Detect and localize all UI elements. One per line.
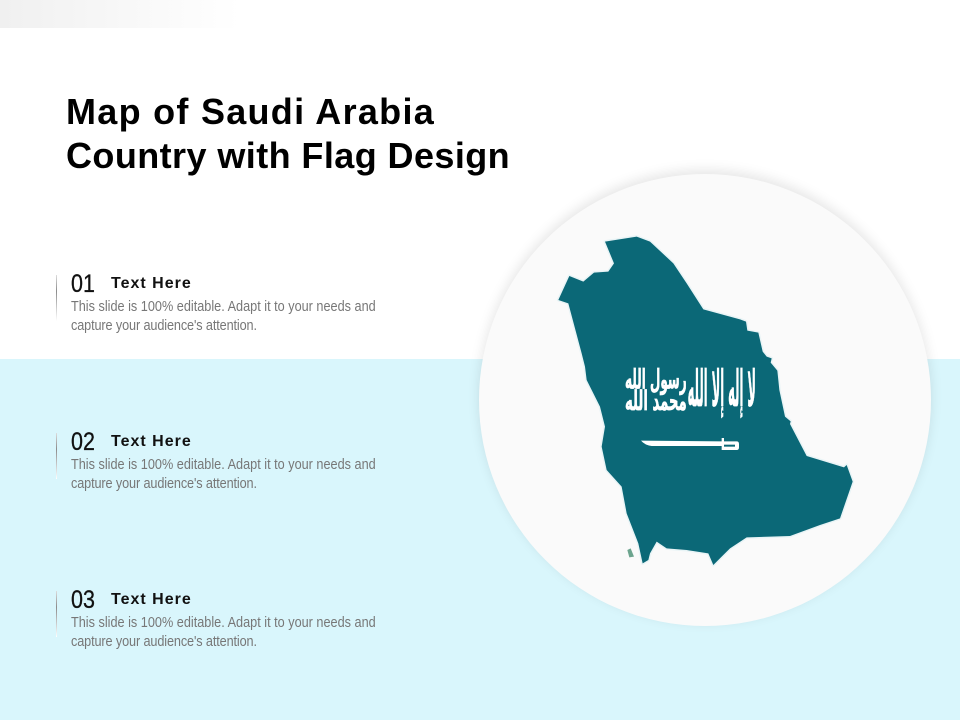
item 01: 01 (71, 270, 95, 298)
item 03: capture your audience's attention. (70, 634, 256, 650)
item 02: This slide is 100% editable. Adapt it to your needs and (70, 457, 375, 473)
item 02: Text Here (111, 433, 192, 450)
item 02: capture your audience's attention. (70, 476, 256, 492)
flag calligraphy (625, 360, 756, 419)
item 01 (56, 270, 375, 334)
title: Country with Flag Design (66, 135, 510, 176)
item 03: Text Here (111, 591, 192, 608)
item 02 (56, 428, 375, 492)
flag sword (641, 438, 739, 450)
map circle (479, 174, 931, 626)
item 01: Text Here (111, 275, 192, 292)
title: Map of Saudi Arabia (66, 91, 435, 132)
item 03 (56, 586, 375, 650)
flag calligraphy: محمد الله (625, 386, 687, 417)
flag calligraphy: رسول الله (625, 364, 687, 395)
item 03: This slide is 100% editable. Adapt it to your needs and (70, 615, 375, 631)
top corner gradient (0, 0, 240, 28)
item 01: This slide is 100% editable. Adapt it to your needs and (70, 299, 375, 315)
title (66, 91, 510, 176)
country shape (558, 237, 853, 565)
item 02: 02 (71, 428, 95, 456)
item 01: capture your audience's attention. (70, 318, 256, 334)
background band (0, 359, 960, 720)
item 03: 03 (71, 586, 95, 614)
small island (627, 548, 634, 557)
